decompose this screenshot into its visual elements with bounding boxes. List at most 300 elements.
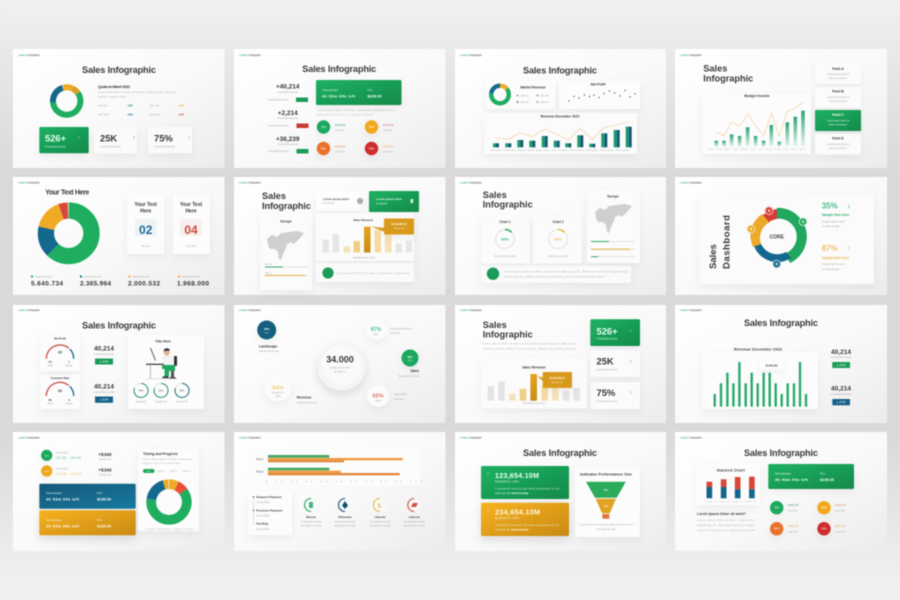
vertical title: Dashboard [722,215,732,269]
revenue bubble: 84% [272,386,284,392]
crypto item: Litecoin: Litecoin [374,515,386,519]
crypto item: Bitcoin: has taken of my soul [300,524,322,528]
quota text block: Item Two [150,104,160,108]
payment timeline: Sending [256,522,268,526]
card 04: Your Text [180,202,202,208]
stat 40,214 blue: ▲ 20.5% [836,401,846,404]
87% stat: 87% [822,244,838,253]
stacked bar chart: Stacked Chart [717,468,745,472]
quota text block: Item Four [150,114,160,116]
quota text block: +45% [127,114,133,116]
heading: Your Text Here [45,189,89,196]
funnel panel: A wonderful serenity has taken possession of [579,524,633,526]
87% stat: our daily strength [822,268,840,271]
donut chart [46,210,92,256]
title: Sales Infographic [82,65,156,75]
net profit scatter chart: Net Profit [591,82,606,86]
sales revenue bar chart: Sample text [552,381,563,384]
97% bubble: Value [373,334,380,336]
payment timeline: 14 Aug 2023 [256,514,270,517]
revenue bar and line chart: January February March April May June July August September October November December [490,149,630,152]
schedule row yellow: +$340 [98,468,112,474]
net profit gauge: 29 [58,350,62,354]
question text block [697,512,756,532]
payment timeline: Previous Payment [256,508,282,512]
title [483,320,533,339]
payment timeline: 14 Aug 2023 [256,501,270,504]
stat 40,214 blue [831,386,852,405]
point B card: Point B [832,90,844,94]
net profit gauge: Net Profit [54,336,66,340]
timing and progress panel: adipiscing elit maecenas [143,462,181,465]
quota donut chart [50,84,83,118]
totals row: 2.000.532 [128,280,160,288]
green time card: Total estimated [775,472,791,476]
revenue bubble: Sample text for item [297,402,317,404]
percent circles: 45% [369,146,375,150]
percent circles: $453.50 [835,503,846,507]
point A card: amet, consectetur [829,77,847,80]
97% bubble [366,319,412,340]
stat +2,214 [268,110,308,128]
customer rate gauge: Refund [65,404,73,406]
title [703,64,753,83]
chart 2 card: 50% [554,236,562,242]
KPI card 25K: A wonderful serenity [596,368,618,372]
stat +2,214: A wonderful serenity [268,124,290,128]
info pill: Lorem ipsum dolor sit amet consectetur adipiscing [337,272,410,275]
lorem callout [316,191,363,211]
schedule row yellow [41,465,112,477]
KPI card 75%: 75% [596,387,616,398]
blue time card: Total estimated [46,492,62,495]
card 02 [127,194,164,254]
card 04: Your Text [186,245,196,248]
slide 13: timing and progress: creative Infographic [18,436,41,440]
stat +36,239: A wonderful serenity [268,150,290,153]
progress rings: Sample 02 [156,402,167,404]
slide 14: payments and crypto: creative Infographic [239,436,262,440]
card 02: Here [140,208,151,214]
market revenue panel: Market Revenue [520,86,546,90]
question text block: adipiscing elit. Maecenas porttitor congue [697,524,756,527]
crypto item: Litecoin: Ł [378,502,382,510]
title [262,191,311,211]
sales bubble [399,350,419,378]
market revenue panel: Label 01 [520,95,530,97]
yellow value card: entire soul, like sweet mornings [495,528,529,532]
slide 4: budget income: creative Infographic [680,54,703,57]
market revenue panel [486,81,556,109]
slide 13: timing and progress [13,432,224,551]
quota text block: Item Three [98,114,110,116]
totals row: Sample item text [182,276,199,278]
title: Sales [483,320,507,330]
card 02: Your Text [135,202,157,208]
percent circles: $465.25 [335,144,346,148]
crypto item: Litecoin [369,498,391,528]
yellow value card: ↑ [487,508,489,514]
crypto item: Bitcoin: Bitcoin [306,515,316,519]
slide 2: stats and green card: creative Infographic [239,54,262,57]
progress rings: Sample 03 [177,402,188,404]
green value card: A wonderful serenity has taken possession of my [495,488,560,490]
green time card: Total estimated [322,89,339,92]
description [483,342,577,350]
stat 40,214 blue: ▲ 20.5% [99,399,109,402]
stat 40,214 blue [94,384,115,403]
slide 9: gauges and illustration [13,305,224,423]
green time card: $235.00 [820,477,834,482]
schedule row green: Sample text [99,458,111,461]
percent circles: 65% [369,125,375,129]
central total bubble: at value lor [334,370,346,374]
point C card highlighted: amet, consectetur [829,124,847,126]
chart 2 card: Sorted by gross rank [547,255,569,258]
chart 1 card: 50% [501,236,509,242]
quota text block: +12% [178,106,184,108]
crypto item: Ethereum: Ethereum [338,515,352,519]
stat +40,214: +40,214 [276,84,300,91]
65% bubble: 65% [372,394,384,400]
Europe map panel: Item 1 [265,263,272,266]
yellow value card [481,503,569,536]
crypto item: Bitcoin [300,498,322,528]
card 02: Your Text [141,245,151,248]
customer rate gauge: Profit [47,402,53,406]
card 04: 04 [184,223,198,237]
slide 10: bubble metrics: creative Infographic [239,309,262,312]
point D card: Lorem ipsum dolor sit [827,143,849,146]
title: Infographic [483,329,533,339]
percent circles [317,120,394,155]
description: Lorem ipsum dolor sit amet, consectetur adipiscing elit. Maecenas [483,342,576,346]
net profit gauge: Refund [65,366,73,368]
sales revenue bar chart: $1,000,000.00 [549,377,565,380]
yellow time card: 4h 53m 09s left [46,524,80,528]
percent circles: Loan Fee [335,152,345,154]
sales bubble: Sample text for item [399,375,419,378]
percent circles: Loan Fee [788,532,798,534]
card 04: Here [185,208,197,214]
title: Infographic [703,73,753,83]
schedule row yellow: Key Details [56,468,68,470]
green value card: entire soul, like sweet mornings [495,492,529,495]
customer rate gauge: Customer Rate [51,376,70,380]
core ring diagram [747,207,807,268]
point B card: Lorem ipsum dolor sit [827,96,849,99]
KPI card 75%: ↑ [629,390,632,395]
point D card [815,134,861,154]
budget income chart: Jan Feb Mar Apr May Jun Jul Aug Sep Oct Nov Dec [708,148,807,151]
blue time card: Price [97,492,103,495]
horizontal bar chart: 0 10 20 30 40 50 60 70 80 90 100 [266,482,423,484]
stat 40,214 blue: A wonderful serenity [831,393,852,396]
stat 40,214 green: A wonderful serenity [831,356,852,359]
65% bubble: Value [375,400,382,402]
97% bubble: Lorem ipsum dolor sit [390,328,412,330]
budget income chart: Budget Income [744,94,770,98]
percent circles: Loan Fee [383,130,393,132]
35% stat: our daily strength [822,225,840,228]
market revenue panel: Label 04 [540,102,550,104]
stat +2,214: A wonderful serenity [277,117,299,120]
schedule row green: 65% [45,455,49,457]
stat 40,214 green [831,349,852,368]
sales revenue bar chart: Sales Revenue [353,218,373,222]
question text block: Lorem Ipsum Dolor sit amet? [697,512,746,516]
slide 15: indicator funnel [455,432,666,551]
title: Sales [262,191,286,201]
funnel panel [575,468,640,537]
yellow time card: Total estimated [46,519,62,522]
green callout card: Lorem ipsum dolor [376,197,403,201]
timing and progress panel [138,449,199,531]
budget income chart [702,94,811,154]
schedule row green: +$340 [98,452,112,458]
market revenue panel: Label 02 [540,95,550,97]
central total bubble [318,342,366,390]
timing and progress panel: Lorem ipsum dolor sit amet consectetur [143,458,192,461]
quota text block: +19% [178,114,184,116]
crypto item: Litecoin red: A wonderful serenity [404,520,425,523]
stat 40,214 green: 40,214 [94,346,114,352]
35% stat: ↓ [847,203,851,210]
percent circles: Loan Fee [383,152,393,154]
87% stat: Sample Item Here [822,256,850,260]
slide 1: quota donut and KPIs: creative Infographic [18,54,41,57]
KPI card green: 526+ [596,326,618,336]
slide 9: gauges and illustration: creative Infographic [18,309,41,312]
KPI card 25K [94,127,137,153]
percent circles [770,501,846,535]
percent circles: $453.50 [835,524,846,528]
point A card: Lorem ipsum dolor sit [827,73,849,76]
quota text block: Item One [98,104,108,108]
sales revenue bar chart [316,213,414,261]
slide 4: budget income [675,49,887,168]
KPI card 75% [148,127,192,153]
stat 40,214 blue: 40,214 [94,384,114,391]
65% bubble: amet item [394,398,404,401]
customer rate gauge [40,375,80,409]
yellow value card: 234,654.10M [495,508,540,516]
chart 1 card [481,217,530,263]
KPI card green: ↑ [78,135,80,140]
percent circles: Loan Fee [788,510,798,512]
slide 8: sales dashboard ring: creative Infographic [680,182,703,184]
totals row: 5.640.734 [31,280,63,288]
description: Lorem ipsum dolor sit amet, consectetur adipiscing elit. [317,109,394,112]
progress rings: 84% [180,390,185,392]
blue time card: $235.00 [97,496,111,502]
KPI card green: 526+ [45,132,67,144]
crypto item: Litecoin: has taken of my soul [369,524,391,528]
title here panel: Title Here [155,340,171,344]
percent circles: $450.50 [383,144,394,148]
slide 12: revenue bars: creative Infographic [680,309,703,312]
revenue bubble: Sample text [272,392,284,394]
percent circles: 80% [321,146,327,150]
sales revenue bar chart: $1,000,000.00 [391,223,407,226]
35% stat: Progress bars in cover [822,220,845,223]
percent circles: Loan Fee [335,130,345,132]
87% stat: Progress bars in cover [822,263,845,266]
KPI card 25K: 25K [100,132,117,144]
slide 7: chart gauges: creative Infographic [460,182,483,184]
title: Sales Infographic [744,318,818,328]
slide 14: payments and crypto [234,432,446,551]
yellow value card: A wonderful serenity has taken possession of my [495,524,560,527]
revenue bar and line chart: Revenue December 2022 [541,114,580,118]
sales revenue bar chart: Sales Revenue [522,366,546,370]
87% stat [822,244,851,271]
quota text block: porttitor congue massa [98,96,127,98]
schedule row yellow: 12:35 - 04:00 [56,472,81,476]
chart 2 card: Chart 2 [552,220,564,224]
description: porttitor congue massa. Fusce posuere, magna sed pulvinar ultricies [483,348,577,350]
sales bubble: Value [408,360,412,362]
crypto item: Litecoin red [404,498,425,528]
point D card: amet, consectetur [829,147,847,150]
KPI card 75%: ↑ [188,135,190,140]
sales revenue bar chart: Sample text [394,227,405,230]
slide 5: large donut [13,177,224,295]
Europe map panel: Item 2 [265,272,272,275]
card 04 [173,194,210,254]
totals row: Sample item text [84,276,101,278]
percent circles: 65% [821,506,827,510]
info strip [481,266,631,283]
KPI card green [39,127,89,153]
stat +36,239: +36,239 [276,136,300,143]
chart 1 card: Chart 1 [499,220,511,224]
KPI card 25K: ↑ [133,135,135,140]
slide 1: quota donut and KPIs [13,49,224,168]
KPI card green: A wonderful serenity [596,338,618,341]
slide 15: indicator funnel: creative Infographic [460,436,483,440]
lorem callout: $ 1,530.95 [323,203,335,205]
totals row: Sample item text [132,276,150,278]
stat 40,214 green: A wonderful serenity [94,353,115,356]
stat 40,214 green: ▲ 20.5% [99,360,109,364]
green value card: $2,000,000.10 + 3.80% [495,482,519,484]
payment timeline: Request Payment [256,495,281,499]
net profit gauge: 73 [48,360,52,364]
Europe map panel [260,213,312,290]
title: Sales [483,190,507,200]
timing and progress panel: Item 1 [158,470,165,473]
crypto item: Ethereum: A wonderful serenity [335,520,356,523]
point A card [815,63,861,84]
question text block: massa. Fusce posuere, magna sed pulvinar [697,529,755,532]
green time card [768,464,854,489]
blue time card: 4h 53m 09s left [46,496,80,502]
revenue bubble: Revenue [297,396,311,400]
crypto item: Bitcoin: A wonderful serenity [301,520,322,523]
totals row [31,276,209,288]
percent circles: $465.25 [788,503,799,507]
progress rings [134,383,189,404]
info strip: Lorem ipsum dolor sit amet, consectetur adipiscing elit. Maecenas porttitor congue massa. [504,270,630,274]
crypto item: Litecoin red: has taken of my soul [404,524,425,528]
customer rate gauge: 4 [68,398,70,402]
horizontal bar chart [248,449,423,485]
revenue bar chart: $1,000,000 [766,365,778,368]
progress rings: 60% [159,390,164,392]
schedule row green [41,450,112,461]
payment timeline [248,491,292,535]
net profit gauge [40,336,80,371]
description [317,109,394,116]
totals row: Sample item text [35,276,52,278]
title here panel [128,335,204,409]
vertical title [708,215,732,269]
stacked bar chart: Item 1 Item 2 Item 3 Item 4 [705,500,756,504]
title: Sales Infographic [302,64,376,74]
quota text block: +38% [127,106,133,108]
horizontal bar chart: Data 2 [256,470,264,474]
slide 10: bubble metrics [234,305,446,423]
Europe panel [587,190,640,263]
stat 40,214 blue: A wonderful serenity [94,391,115,394]
quota text block: Lorem ipsum dolor sit amet, consectetur adipiscing elit maecenas [98,91,177,94]
net profit scatter chart [559,81,640,109]
timing and progress panel: Item [147,470,151,473]
funnel panel: Indicator Performance One [580,472,633,476]
green value card: ↑ [487,471,489,477]
stat 40,214 green: 40,214 [831,349,851,356]
slide 11: KPIs and sales revenue: creative Infographic [460,309,483,312]
percent circles: 75% [774,506,780,510]
green callout card [369,191,419,212]
KPI card 25K [590,350,640,377]
title: Sales Infographic [82,321,156,331]
point C card highlighted: Lorem ipsum dolor sit [827,120,849,122]
schedule row yellow: Sample text [99,474,111,476]
65% bubble: Lorem ipsum [394,393,407,396]
customer rate gauge: 56 [48,398,52,402]
landscape bubble: 84% [264,327,270,331]
percent circles: 75% [321,125,327,129]
stacked bar chart [696,464,760,505]
slide 6: Europe and sales revenue: creative Infographic [239,182,262,184]
point B card: amet, consectetur [829,100,847,103]
green time card: Price [820,472,826,476]
revenue bar chart: Revenue December 2022 [734,348,782,352]
stat +2,214: +2,214 [278,110,298,117]
net profit gauge: Profit [47,364,53,368]
landscape bubble: Sample text for item [259,350,280,353]
quota text block [98,85,184,116]
slide 5: large donut: creative Infographic [18,182,41,184]
point A card: Point A [832,67,844,71]
Europe map panel: Europe [280,220,292,224]
stat +40,214: A wonderful serenity [277,91,299,94]
title: Sales Infographic [523,448,597,458]
icon: person at desk [146,348,177,379]
timing and progress panel: Item 3 [183,470,190,473]
schedule row yellow: 45% [45,471,49,473]
net profit gauge: 1 [68,360,70,364]
central total bubble: 34.000 [326,354,354,364]
35% stat: Sample Item Here [822,213,850,217]
market revenue panel: Label 03 [520,102,530,104]
yellow value card: $2,000,000.10 + 3.80% [495,518,519,520]
KPI card 25K: A wonderful serenity [100,146,122,149]
KPI card green: A wonderful serenity [45,146,67,149]
stat +40,214 [268,84,308,102]
